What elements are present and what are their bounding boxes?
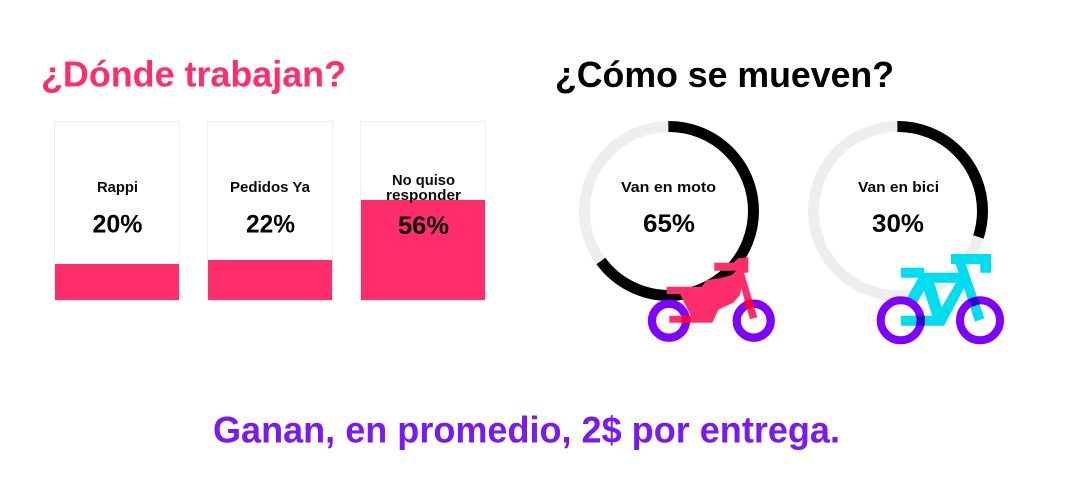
panel: Rappi card	[54, 122, 180, 300]
label: Rappi: Rappi	[97, 180, 138, 196]
bar: Pedidos Ya	[208, 260, 332, 300]
icon: motorcycle	[652, 257, 771, 338]
chart: moto donut 65%	[584, 126, 754, 296]
label: No quiso responder: responder	[386, 188, 461, 204]
value: 65%: 65%	[643, 210, 695, 238]
label: No quiso responder: No quiso	[392, 173, 455, 189]
label: Van en bici: Van en bici	[858, 180, 939, 196]
heading: ¿Dónde trabajan?: ¿Dónde trabajan?	[41, 54, 346, 94]
bar: No quiso responder	[361, 200, 485, 300]
bar: Rappi	[55, 264, 179, 300]
footer statement: Ganan, en promedio, 2$ por entrega.	[213, 410, 840, 450]
label: No quiso responder	[386, 173, 461, 204]
value: 22%: 22%	[246, 210, 295, 238]
label: Van en moto: Van en moto	[621, 180, 716, 196]
value: 56%: 56%	[398, 212, 449, 240]
panel: Pedidos Ya card	[208, 122, 332, 300]
icon: bicycle	[881, 254, 1000, 340]
heading: ¿Cómo se mueven?: ¿Cómo se mueven?	[555, 54, 894, 95]
value: 20%: 20%	[92, 210, 142, 238]
label: Pedidos Ya: Pedidos Ya	[230, 180, 311, 196]
chart: bici donut 30%	[814, 126, 982, 296]
value: 30%: 30%	[872, 210, 924, 238]
panel: No quiso responder card	[360, 122, 486, 300]
